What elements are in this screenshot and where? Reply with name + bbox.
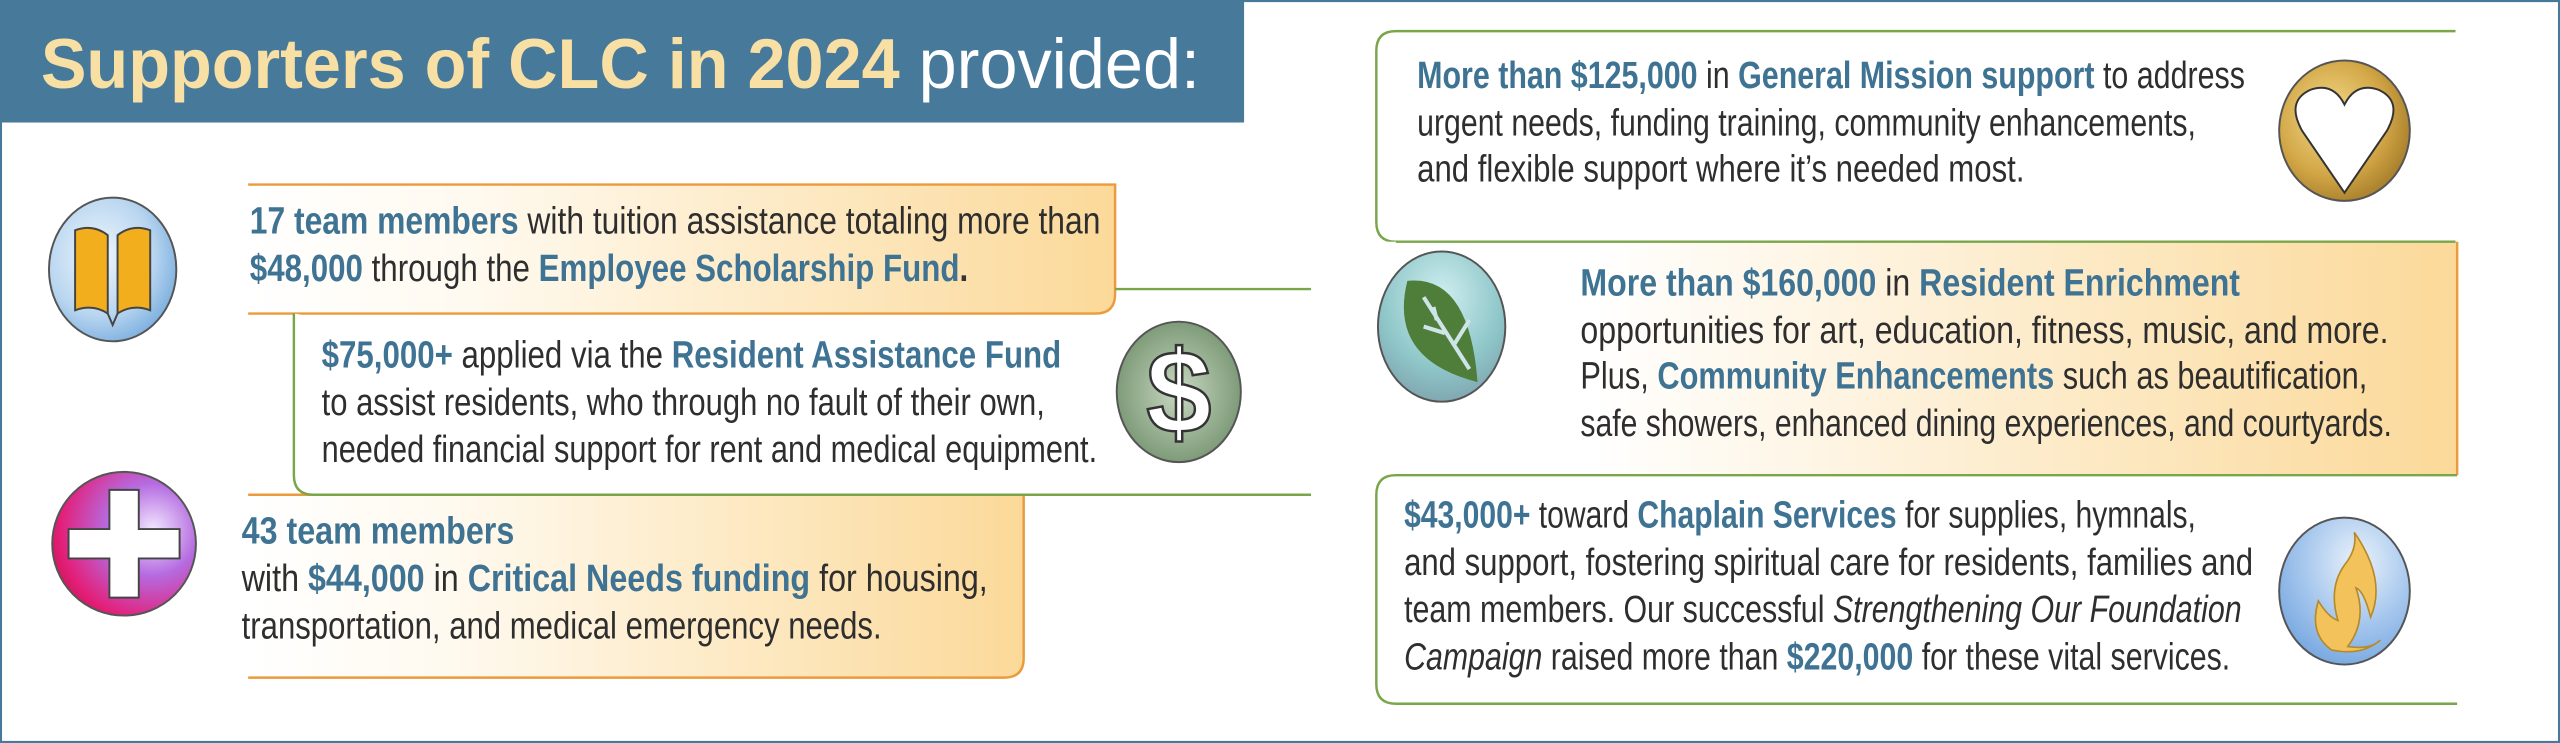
- panel: chaplain services: $43,000+ toward Chaplain Services for supplies, hymnals,: [1404, 493, 2196, 535]
- icon: leaf: [1378, 252, 1505, 402]
- panel: critical needs: transportation, and medical emergency needs.: [242, 604, 882, 646]
- panel: resident assistance: $75,000+ applied via the Resident Assistance Fund: [322, 333, 1061, 375]
- panel: resident enrichment: Plus, Community Enhancements such as beautification,: [1580, 355, 2367, 397]
- panel: resident assistance: [294, 289, 1311, 495]
- panel: critical needs: [241, 495, 1024, 678]
- icon: dollar: [1117, 322, 1241, 462]
- icon: medical cross: [52, 472, 196, 616]
- title banner: [0, 0, 1244, 123]
- icon: flame: [2279, 518, 2410, 665]
- panel: chaplain services: team members. Our successful Strengthening Our Foundation: [1404, 588, 2242, 630]
- panel: general mission: [1376, 31, 2456, 242]
- panel: general mission: urgent needs, funding training, community enhancements,: [1417, 102, 2196, 144]
- panel: resident assistance: to assist residents, who through no fault of their own,: [322, 381, 1045, 423]
- title: Supporters of CLC in 2024 provided:: [41, 24, 1200, 103]
- panel: chaplain services: and support, fostering spiritual care for residents, families and: [1404, 541, 2253, 583]
- panel: resident enrichment: More than $160,000 in Resident Enrichment: [1580, 262, 2240, 304]
- icon: book: [49, 198, 176, 341]
- panel: resident enrichment: [1376, 242, 2457, 475]
- panel: employee scholarship: 17 team members with tuition assistance totaling more than: [250, 200, 1100, 242]
- icon: dollar: $: [1146, 327, 1211, 458]
- panel: employee scholarship: $48,000 through the Employee Scholarship Fund.: [250, 247, 968, 289]
- panel: general mission: and flexible support where it’s needed most.: [1417, 147, 2024, 189]
- panel: employee scholarship: [248, 185, 1115, 314]
- panel: critical needs: 43 team members: [242, 510, 514, 552]
- panel: chaplain services: [1376, 475, 2457, 704]
- panel: chaplain services: Campaign raised more than $220,000 for these vital services.: [1404, 635, 2230, 677]
- panel: resident enrichment: opportunities for art, education, fitness, music, and more.: [1580, 309, 2389, 351]
- panel: general mission: More than $125,000 in General Mission support to address: [1417, 54, 2245, 96]
- panel: resident assistance: needed financial support for rent and medical equipment.: [322, 428, 1097, 470]
- icon: heart: [2279, 60, 2410, 201]
- panel: critical needs: with $44,000 in Critical Needs funding for housing,: [241, 557, 988, 599]
